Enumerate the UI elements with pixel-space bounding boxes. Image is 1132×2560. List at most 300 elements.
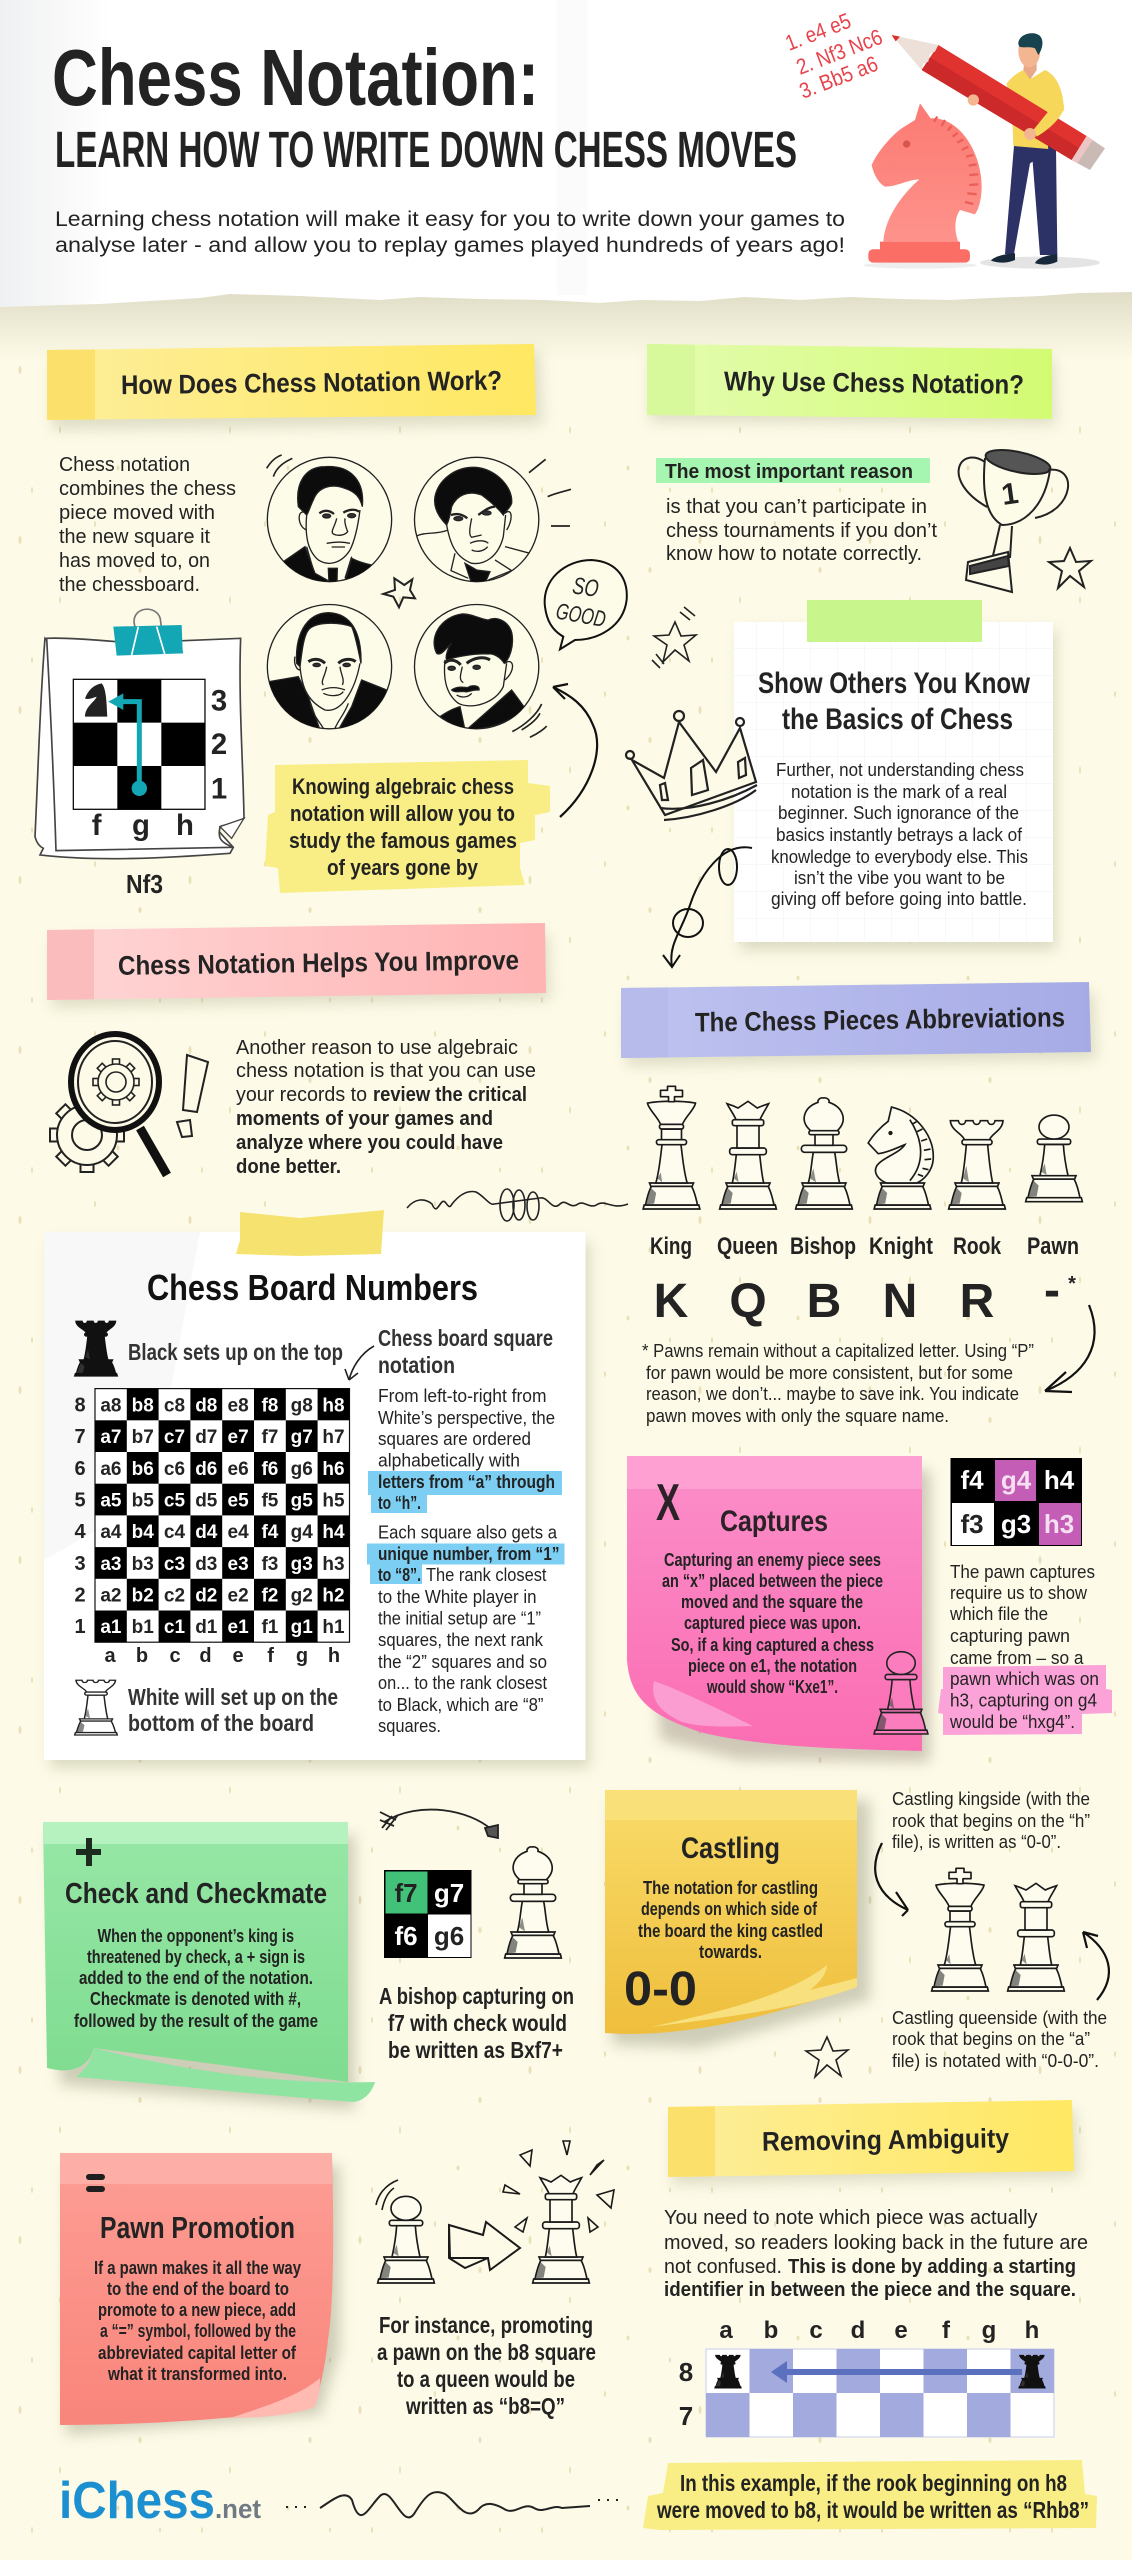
piece: queen <box>720 1101 776 1209</box>
chess board grid: a3 <box>100 1554 121 1575</box>
heading: how does chess notation work: How Does Chess Notation Work? <box>121 366 502 400</box>
label: white sets up: White will set up on the <box>128 1684 338 1710</box>
text: tournaments <box>666 496 937 565</box>
curved arrow: queenside <box>1083 1932 1109 2000</box>
chess board grid: c5 <box>164 1490 185 1512</box>
heading: chess notation helps you improve <box>47 923 551 1008</box>
chess board grid: a5 <box>100 1490 122 1512</box>
illustration: man carrying a pencil <box>892 33 1105 269</box>
chess board grid: d8 <box>195 1396 217 1416</box>
curved arrow to footnote <box>1045 1305 1095 1392</box>
piece: bishop <box>796 1098 852 1209</box>
rank numbers: 8 <box>74 1394 86 1416</box>
heading: removing ambiguity: Removing Ambiguity <box>762 2123 1009 2157</box>
rank numbers <box>74 1394 86 1638</box>
chess board grid: c3 <box>164 1554 185 1575</box>
file letters: b <box>764 2317 778 2344</box>
binder clip <box>113 609 183 656</box>
queen <box>533 2175 589 2283</box>
text: pawn captures: pawn which was on <box>950 1669 1099 1689</box>
text: castling kingside: Castling kingside (with the <box>892 1789 1090 1809</box>
chess board grid: a4 <box>100 1522 122 1543</box>
chess board grid: d4 <box>195 1522 218 1543</box>
chess board grid: f8 <box>261 1396 278 1416</box>
text: castling queenside <box>892 2008 1107 2071</box>
chess board grid: h4 <box>322 1522 345 1543</box>
check heading: Check and Checkmate <box>65 1878 327 1910</box>
chess board grid: f1 <box>261 1617 279 1638</box>
yellow tape <box>236 1210 384 1256</box>
chess board grid: e8 <box>228 1396 249 1416</box>
chess board grid: g3 <box>291 1554 313 1575</box>
piece names: Bishop <box>790 1233 856 1260</box>
small board: pawn capture: h3 <box>1044 1509 1074 1539</box>
captures body: piece on e1, the notation <box>688 1656 857 1676</box>
text: removing ambiguity explanation <box>664 2207 1088 2301</box>
heading: how does chess notation work <box>47 344 543 430</box>
text: pawn captures: The pawn captures <box>950 1562 1095 1582</box>
chess board grid: b3 <box>132 1554 154 1575</box>
note body <box>771 760 1028 909</box>
note: show others you know <box>734 600 1056 950</box>
chess board grid: d2 <box>195 1586 217 1606</box>
ambiguity board <box>679 2317 1054 2437</box>
text: square notation explanation: to Black, which are “8” <box>378 1695 544 1715</box>
text: castling kingside <box>892 1789 1090 1852</box>
bottom yellow callout <box>643 2460 1097 2530</box>
file letters: d <box>851 2317 865 2344</box>
heading: the chess pieces abbreviations <box>621 982 1097 1066</box>
piece letters: N <box>883 1275 917 1328</box>
text: square notation explanation: to the White player in <box>378 1587 536 1607</box>
text: square notation explanation <box>378 1386 560 1736</box>
title: Chess Notation: <box>52 33 539 122</box>
board coordinates: 3 <box>211 685 227 718</box>
chess board grid: d1 <box>195 1617 218 1638</box>
text: square notation explanation: on... to the rank closest <box>378 1673 547 1693</box>
chess board grid: a7 <box>100 1427 121 1448</box>
piece names: Rook <box>953 1233 1002 1260</box>
chess board grid: h3 <box>322 1554 345 1575</box>
text: pawn captures: came from – so a <box>950 1648 1084 1668</box>
file letters: e <box>894 2317 908 2344</box>
heading: removing ambiguity <box>668 2100 1079 2185</box>
text: promotion example: to a queen would be <box>397 2366 575 2392</box>
piece names <box>650 1233 1079 1260</box>
text: square notation explanation: to “h”. <box>378 1493 421 1513</box>
small board: f7 check: f7 <box>394 1878 418 1908</box>
text: square notation explanation: White’s perspective, the <box>378 1408 555 1428</box>
chess board grid: h8 <box>322 1396 345 1416</box>
text: pawn captures: would be “hxg4”. <box>949 1712 1075 1732</box>
small arrow <box>345 1346 374 1380</box>
note body: notation is the mark of a real <box>791 782 1007 802</box>
intro paragraph: analyse later - and allow you to replay games played hundreds of years ago! <box>55 234 845 257</box>
note: captures <box>627 1456 930 1762</box>
chess board grid: a2 <box>100 1586 121 1606</box>
arrow with feather <box>380 1810 498 1838</box>
chess board grid: d6 <box>195 1459 217 1480</box>
chess board grid: f5 <box>261 1490 279 1512</box>
heading: why use chess notation: Why Use Chess Notation? <box>724 366 1024 400</box>
star between portraits <box>383 578 415 607</box>
piece letters: Q <box>729 1275 767 1328</box>
rank numbers: 1 <box>74 1616 86 1638</box>
promotion body: If a pawn makes it all the way <box>94 2258 301 2278</box>
doodle: crown <box>626 711 757 820</box>
rank numbers: 6 <box>74 1458 86 1480</box>
captures body: moved and the square the <box>681 1592 863 1612</box>
board coordinates: 1 <box>211 772 227 805</box>
piece names: Pawn <box>1027 1233 1079 1260</box>
text: removing ambiguity explanation: identifier in between the piece and the square. <box>664 2279 1076 2301</box>
captures body: would show “Kxe1”. <box>706 1677 838 1697</box>
text: review critical moments: chess notation is that you can use <box>236 1060 536 1082</box>
check body: When the opponent’s king is <box>98 1926 294 1946</box>
captures body: captured piece was upon. <box>684 1613 861 1633</box>
chess board grid: g8 <box>291 1396 313 1416</box>
text: square notation explanation: Each square also gets a <box>378 1522 558 1542</box>
mini chessboard <box>73 679 205 809</box>
logo: iChess.net: iChess <box>59 2472 215 2530</box>
file letters: e <box>232 1645 244 1667</box>
sub heading: square notation: notation <box>378 1352 455 1378</box>
small board: f7 check: f6 <box>394 1921 418 1951</box>
heading: chess notation helps you improve: Chess Notation Helps You Improve <box>118 945 519 981</box>
sub heading: square notation: Chess board square <box>378 1325 553 1351</box>
chess board grid: e3 <box>228 1554 249 1575</box>
board coordinates: 2 <box>211 728 227 761</box>
text: tournaments: is that you can’t participate in <box>666 496 927 518</box>
doodle: bottom squiggle <box>286 2492 624 2517</box>
speech bubble: so good: SO <box>571 573 600 603</box>
motion marks <box>267 455 571 737</box>
text: bishop capturing: be written as Bxf7+ <box>388 2037 563 2063</box>
promotion body: abbreviated capital letter of <box>98 2343 297 2363</box>
text: pawn captures: capturing pawn <box>950 1626 1070 1646</box>
icon: trophy <box>959 445 1068 592</box>
piece letters: - <box>1044 1264 1060 1317</box>
text: bishop capturing <box>379 1983 574 2063</box>
speech bubble: so good <box>545 560 627 649</box>
sub heading: square notation <box>378 1325 553 1378</box>
text: chess notation explanation: has moved to, on <box>59 550 210 572</box>
chess board grid <box>95 1389 350 1642</box>
text: pawn captures: h3, capturing on g4 <box>950 1691 1097 1711</box>
black rook <box>75 1321 117 1376</box>
curved arrow to portraits <box>553 684 597 817</box>
small board: pawn capture: h4 <box>1044 1465 1075 1495</box>
note heading: the Basics of Chess <box>782 703 1013 736</box>
text: chess notation explanation: the chessboard. <box>59 574 200 596</box>
pawn footnote: * Pawns remain without a capitalized letter. Using “P” <box>642 1341 1034 1361</box>
chess board grid: b2 <box>132 1586 154 1606</box>
rank numbers <box>679 2357 693 2431</box>
text: pawn captures: require us to show <box>950 1583 1088 1603</box>
text: tournaments: chess tournaments if you don’t <box>666 520 937 542</box>
promotion heading: Pawn Promotion <box>100 2210 295 2245</box>
chess board grid: h7 <box>322 1427 345 1448</box>
chess board grid: b8 <box>132 1396 154 1416</box>
rook move arrow <box>771 2361 1022 2383</box>
text: removing ambiguity explanation: not confused. <box>664 2256 782 2278</box>
illustration: red notation moves <box>782 8 886 104</box>
text: square notation explanation: the initial setup are “1” <box>378 1609 541 1629</box>
chess board grid: b7 <box>132 1427 154 1448</box>
note body: Further, not understanding chess <box>776 760 1024 780</box>
doodle: squiggle <box>407 1189 628 1221</box>
text: review critical moments: moments of your games and <box>236 1108 493 1130</box>
file letters: b <box>136 1645 148 1667</box>
check body: followed by the result of the game <box>74 2011 318 2031</box>
castling body: The notation for castling <box>643 1878 818 1898</box>
text: review critical moments: analyze where you could have <box>236 1132 503 1154</box>
heading: why use chess notation <box>647 344 1056 425</box>
rank numbers: 7 <box>679 2401 693 2431</box>
pawn footnote: reason, we don’t... maybe to save ink. You indicate <box>646 1384 1019 1404</box>
note body: beginner. Such ignorance of the <box>778 803 1019 823</box>
rank numbers: 8 <box>679 2357 693 2387</box>
small board: f7 check <box>384 1870 472 1958</box>
chess board grid: a8 <box>100 1396 121 1416</box>
small board: f7 check: g7 <box>434 1878 464 1908</box>
text: square notation explanation: The rank closest <box>426 1565 546 1585</box>
text: promotion example: written as “b8=Q” <box>405 2393 565 2419</box>
chess board grid: a6 <box>100 1459 121 1480</box>
chess board grid: d3 <box>195 1554 217 1575</box>
text: square notation explanation: squares. <box>378 1716 441 1736</box>
intro paragraph: Learning chess notation will make it easy for you to write down your games to <box>55 208 845 231</box>
file letters <box>719 2317 1039 2344</box>
curved arrow: kingside <box>875 1843 908 1916</box>
yellow callout <box>265 760 550 893</box>
check body: Checkmate is denoted with #, <box>90 1989 301 2009</box>
captures body: an “x” placed between the piece <box>662 1571 883 1591</box>
chess board grid: g6 <box>291 1459 313 1480</box>
chess board grid: f6 <box>261 1459 278 1480</box>
chess board grid: f4 <box>261 1522 279 1543</box>
portraits group <box>267 455 571 737</box>
note body: basics instantly betrays a lack of <box>776 825 1023 845</box>
text: promotion example: For instance, promoting <box>379 2312 593 2338</box>
teal move arrow <box>108 693 147 796</box>
white rook <box>75 1680 117 1735</box>
text: review critical moments: Another reason to use algebraic <box>236 1037 518 1059</box>
green tape <box>807 600 982 642</box>
note body: giving off before going into battle. <box>771 889 1027 909</box>
chess board grid: g1 <box>291 1617 313 1638</box>
piece: king <box>643 1086 700 1209</box>
yellow callout: Knowing algebraic chess <box>292 774 514 799</box>
file letters: h <box>1025 2317 1039 2344</box>
text: square notation explanation: to “8”. <box>378 1565 421 1585</box>
text: review critical moments: your records to <box>236 1084 367 1106</box>
chess board grid: h5 <box>322 1490 345 1512</box>
text: chess notation explanation: piece moved with <box>59 502 215 524</box>
text: castling queenside: rook that begins on the “a” <box>892 2029 1090 2049</box>
text: castling queenside: file) is notated with “0-0-0”. <box>892 2051 1099 2071</box>
equals symbol <box>86 2174 105 2192</box>
file letters <box>104 1645 340 1667</box>
illustration: red notation moves: 1. e4 e5 <box>782 8 854 56</box>
text: castling kingside: file), is written as “0-0”. <box>892 1832 1061 1852</box>
text: removing ambiguity explanation: moved, so readers looking back in the future are <box>664 2232 1088 2254</box>
rank numbers: 7 <box>74 1426 86 1448</box>
0-0 label: 0-0 <box>624 1963 697 2016</box>
note body: isn’t the vibe you want to be <box>794 868 1005 888</box>
check body <box>74 1926 318 2031</box>
portrait 3 <box>267 604 392 730</box>
highlighted reason: The most important reason <box>665 461 913 483</box>
board coordinates: f <box>92 809 102 842</box>
file letters: g <box>296 1645 308 1667</box>
note heading: Show Others You Know <box>758 667 1031 700</box>
piece names: Queen <box>717 1233 778 1260</box>
portrait 2 <box>414 457 539 583</box>
text: pawn captures: which file the <box>949 1604 1048 1624</box>
bishop illustration <box>505 1847 561 1958</box>
chess board grid: e4 <box>228 1522 249 1543</box>
panel: chess board numbers <box>44 1210 590 1768</box>
doodle: star left of note <box>652 607 696 668</box>
note: castling <box>605 1790 870 2048</box>
icon: magnifier and gears <box>50 1034 208 1175</box>
castling heading: Castling <box>681 1832 780 1865</box>
promotion body: a “=” symbol, followed by the <box>100 2321 296 2341</box>
promotion body: what it transformed into. <box>107 2364 287 2384</box>
file letters: a <box>719 2317 733 2344</box>
intro paragraph <box>55 208 845 257</box>
text: castling kingside: rook that begins on the “h” <box>892 1811 1090 1831</box>
pawn footnote: pawn moves with only the square name. <box>646 1406 949 1426</box>
small board: pawn capture: f4 <box>960 1465 984 1495</box>
captures symbol: X <box>656 1474 680 1532</box>
captures body: So, if a king captured a chess <box>671 1635 874 1655</box>
chess board grid: c1 <box>164 1617 185 1638</box>
chess board grid: g5 <box>291 1490 313 1512</box>
check body: added to the end of the notation. <box>79 1968 313 1988</box>
rank numbers: 5 <box>74 1490 86 1512</box>
chess board grid: f2 <box>261 1586 278 1606</box>
text: review critical moments: review the critical <box>373 1084 527 1106</box>
text: removing ambiguity explanation: This is done by adding a starting <box>788 2256 1076 2278</box>
piece letters <box>654 1264 1076 1328</box>
chess board grid: h6 <box>322 1459 345 1480</box>
chess board grid: e7 <box>228 1427 249 1448</box>
chess board grid: h1 <box>322 1617 345 1638</box>
panel heading: Chess Board Numbers <box>147 1267 478 1308</box>
pawn on note <box>874 1652 928 1734</box>
file letters: f <box>942 2317 951 2344</box>
text: removing ambiguity explanation: You need to note which piece was actually <box>664 2207 1038 2229</box>
chess board grid: e2 <box>228 1586 249 1606</box>
chess piece row <box>643 1086 1082 1209</box>
chess board grid: e6 <box>228 1459 249 1480</box>
note: check and checkmate <box>43 1822 375 2110</box>
file letters: d <box>199 1645 212 1667</box>
chess board grid: h2 <box>322 1586 345 1606</box>
plus symbol <box>76 1838 101 1866</box>
speech bubble: so good: GOOD <box>554 598 608 632</box>
heading: the chess pieces abbreviations: The Chess Pieces Abbreviations <box>695 1002 1065 1038</box>
yellow callout: of years gone by <box>327 855 479 880</box>
rank numbers: 3 <box>74 1553 86 1575</box>
chess board grid: c4 <box>164 1522 185 1543</box>
small board: pawn capture: g4 <box>1001 1465 1032 1495</box>
text: promotion example: a pawn on the b8 square <box>377 2339 596 2365</box>
pawn footnote: for pawn would be more consistent, but for some <box>646 1363 1013 1383</box>
file letters: h <box>328 1645 340 1667</box>
promotion body <box>94 2258 301 2384</box>
text: bishop capturing: A bishop capturing on <box>379 1983 574 2009</box>
sparkles <box>503 2141 614 2232</box>
board coordinates: h <box>176 809 194 842</box>
promotion body: promote to a new piece, add <box>98 2300 296 2320</box>
illustration: red notation moves: 2. Nf3 Nc6 <box>793 24 886 80</box>
doodle: star by trophy <box>1049 548 1091 588</box>
pawn footnote <box>642 1341 1034 1426</box>
text: castling queenside: Castling queenside (with the <box>892 2008 1107 2028</box>
rook on a8 <box>715 2355 741 2388</box>
text: square notation explanation: unique number, from “1” <box>378 1544 560 1564</box>
piece: pawn <box>1026 1115 1082 1202</box>
text: square notation explanation: squares are ordered <box>378 1429 531 1449</box>
chess board grid: f3 <box>261 1554 278 1575</box>
small board: pawn capture: g3 <box>1001 1509 1031 1539</box>
piece: rook <box>949 1121 1005 1209</box>
yellow callout: study the famous games <box>289 828 517 853</box>
file letters: g <box>982 2317 996 2344</box>
rank numbers: 2 <box>74 1584 86 1606</box>
chess board grid: c8 <box>164 1396 185 1416</box>
note: pawn promotion <box>60 2153 340 2435</box>
block arrow <box>449 2222 520 2270</box>
piece names: Knight <box>869 1233 933 1260</box>
illustration: red knight <box>863 103 982 269</box>
text: review critical moments <box>236 1037 536 1178</box>
piece letters: B <box>807 1275 841 1328</box>
chess board grid: e5 <box>228 1490 249 1512</box>
doodle: loop arrow <box>663 847 752 967</box>
chess board grid: c7 <box>164 1427 185 1448</box>
text: promotion example <box>377 2312 596 2419</box>
chess board grid: c6 <box>164 1459 185 1480</box>
chess board grid: c2 <box>164 1586 185 1606</box>
text: square notation explanation: the “2” squares and so <box>378 1652 547 1672</box>
pink highlights <box>938 1665 1112 1735</box>
small board: pawn capture <box>950 1458 1082 1546</box>
chess board grid: g7 <box>291 1427 313 1448</box>
portrait 1 <box>267 457 392 583</box>
small board: pawn capture: f3 <box>960 1509 984 1539</box>
piece names: King <box>650 1233 692 1260</box>
captures heading: Captures <box>720 1505 828 1538</box>
clipboard with knight move diagram <box>35 609 244 859</box>
chess board grid: g2 <box>291 1586 313 1606</box>
chess board grid: d5 <box>195 1490 218 1512</box>
board coordinates <box>92 685 227 842</box>
castling body: depends on which side of <box>641 1899 818 1919</box>
castling body <box>638 1878 823 1962</box>
file letters: f <box>267 1645 274 1667</box>
text: chess notation explanation: combines the chess <box>59 478 236 500</box>
text: chess notation explanation <box>59 454 236 596</box>
chess board grid: b4 <box>132 1522 154 1543</box>
label: white sets up: bottom of the board <box>128 1710 314 1736</box>
portrait 4 <box>414 604 539 730</box>
text: chess notation explanation: Chess notation <box>59 454 190 476</box>
king and queen illustration <box>932 1868 1064 1991</box>
